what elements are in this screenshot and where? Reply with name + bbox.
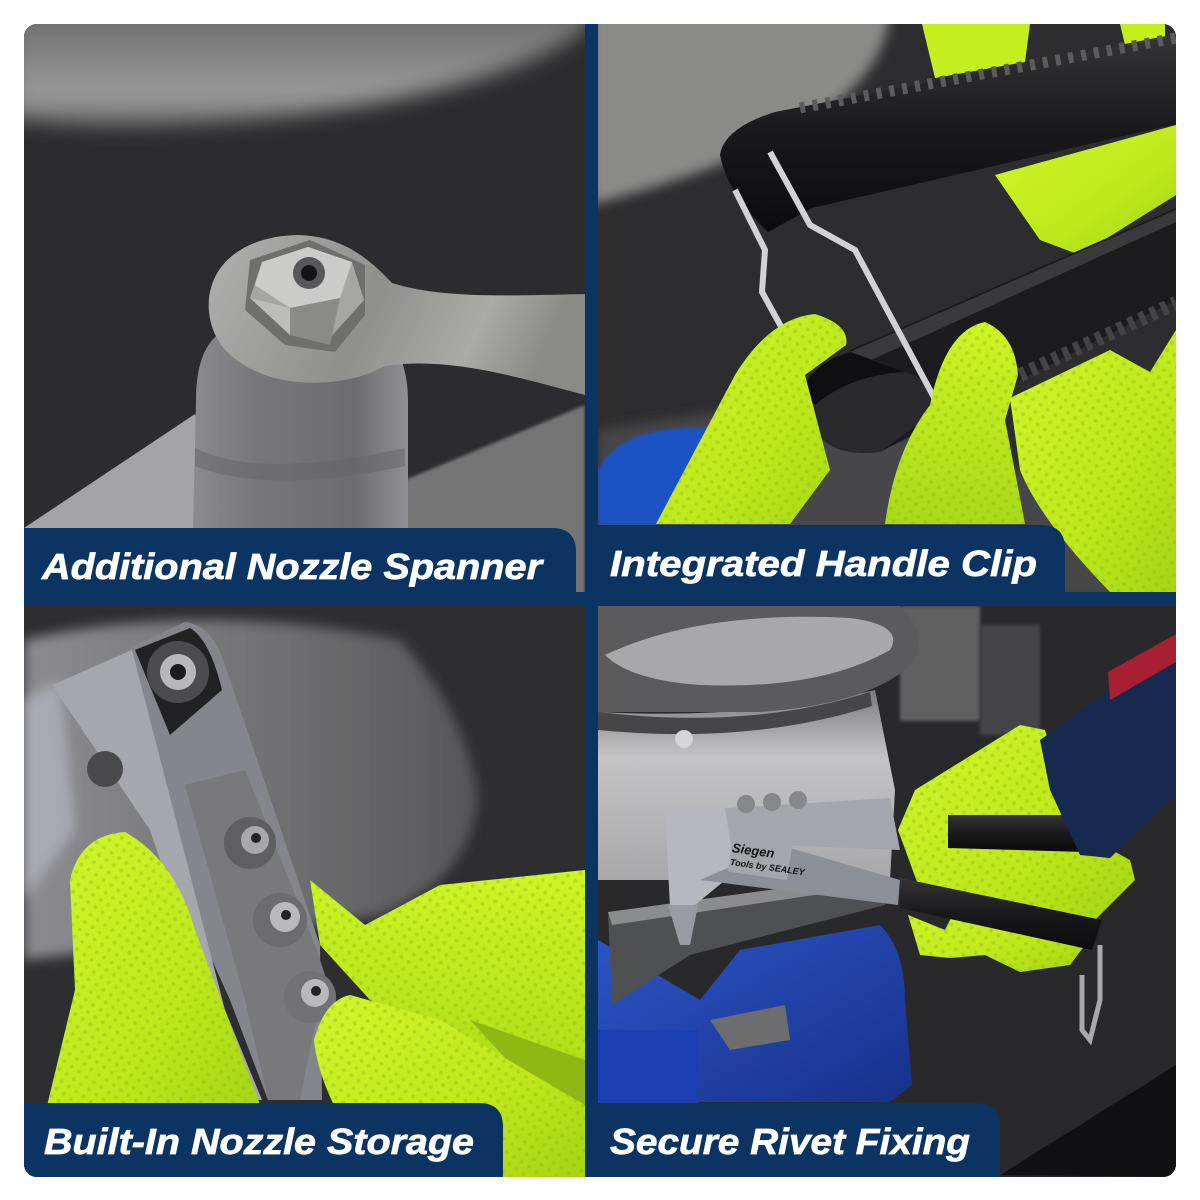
panel: secure rivet fixing — [598, 606, 1176, 1177]
photo: upper handle ribbed edge — [800, 38, 1176, 108]
photo backdrop: alloy wheel spokes — [605, 617, 893, 686]
caption: built-in nozzle storage — [24, 1103, 503, 1177]
caption: integrated handle clip: Integrated Handle Clip — [610, 543, 1037, 584]
photo: glove behind top left — [922, 24, 1030, 78]
photo: pivot rivet — [87, 751, 123, 787]
photo: brand label on riveter: Siegen — [731, 840, 775, 861]
photo: lower grey surface — [598, 410, 1110, 592]
photo backdrop: alloy wheel cylinder — [598, 690, 895, 880]
photo: black end cap — [812, 354, 931, 453]
photo: floor strip — [1000, 1065, 1176, 1177]
caption: built-in nozzle storage: Built-In Nozzle Storage — [44, 1121, 474, 1162]
photo: black lower handle — [850, 208, 1176, 452]
photo: stored nozzle 3 — [301, 976, 336, 1022]
photo: spanner inner shadow around nut — [245, 240, 365, 352]
photo: hanging wire clip — [1082, 945, 1100, 1040]
photo: steel sheet in vice — [608, 875, 885, 1005]
photo: three stored nozzles — [737, 791, 807, 813]
photo backdrop: dark machine part — [980, 625, 1040, 735]
photo: steel spanner — [209, 235, 585, 395]
photo backdrop: grey machine — [900, 606, 980, 721]
photo: right gloved hand upper — [310, 870, 585, 1060]
photo: right gloved hand — [1010, 330, 1176, 592]
panel: additional nozzle spanner — [10, 5, 590, 600]
photo: navy sleeve — [1040, 662, 1176, 858]
photo: grey riveter head body — [139, 622, 322, 1100]
photo: lower handle ribbed edge — [1020, 303, 1176, 375]
photo: red sleeve trim — [1108, 634, 1176, 700]
photo: channel holding nozzles — [185, 770, 325, 1100]
photo: left gloved hand — [46, 832, 262, 1110]
photo: nozzle tip — [668, 905, 698, 945]
photo: brand label on riveter: Tools by SEALEY — [729, 857, 806, 877]
photo: stored nozzle 1 — [224, 817, 276, 869]
photo: cylinder shoulder shadow — [195, 448, 405, 480]
photo backdrop: blurred wheel rim — [590, 10, 890, 205]
caption: secure rivet fixing — [585, 1103, 1000, 1177]
photo: glove behind middle — [995, 125, 1176, 255]
photo: wire clip — [735, 152, 938, 405]
photo: vice lower block — [598, 1030, 698, 1110]
photo: left gloved fingers — [656, 314, 846, 524]
panel: built-in nozzle storage — [24, 606, 585, 1177]
photo: gloved hand — [898, 725, 1135, 920]
photo: centre gloved finger — [885, 322, 1025, 524]
caption: integrated handle clip — [585, 525, 1176, 606]
photo backdrop: pale left object — [24, 680, 75, 900]
photo: wheel valve — [675, 730, 693, 748]
photo: hex nut with bore — [250, 247, 364, 345]
photo: black upper handle — [720, 34, 1176, 232]
photo: riveter upper arm and head — [665, 798, 900, 905]
photo: upper black grip — [948, 815, 1085, 852]
photo: gloved fingers — [908, 900, 1085, 972]
photo: blue blurred object — [598, 428, 708, 525]
photo: head bore — [147, 641, 209, 703]
photo: rim lip shadow — [598, 692, 872, 734]
photo: lower black grip — [900, 878, 1102, 950]
photo: grey workbench right — [405, 405, 585, 600]
photo: glove behind top right — [1120, 24, 1165, 45]
photo backdrop: alloy wheel rim — [598, 606, 919, 712]
photo: glove shadow crease — [470, 1020, 585, 1105]
photo: right gloved hand lower — [314, 995, 585, 1177]
photo backdrop: blurred wheel rim — [10, 5, 590, 126]
photo: blue vice — [598, 925, 912, 1102]
panel: integrated handle clip — [590, 10, 1176, 600]
photo: stored nozzle 2 — [253, 893, 307, 947]
caption: additional nozzle spanner: Additional Nozzle Spanner — [41, 546, 544, 587]
photo: grey workbench left — [24, 414, 196, 528]
photo backdrop: blurred wheel — [24, 620, 478, 960]
caption: secure rivet fixing: Secure Rivet Fixing — [610, 1121, 970, 1162]
photo: grey cylinder post — [193, 330, 408, 530]
photo: head recess — [135, 628, 222, 735]
photo: brand label on riveter — [728, 836, 806, 880]
photo: vice handle steel — [710, 1005, 790, 1050]
caption: additional nozzle spanner — [24, 528, 585, 606]
